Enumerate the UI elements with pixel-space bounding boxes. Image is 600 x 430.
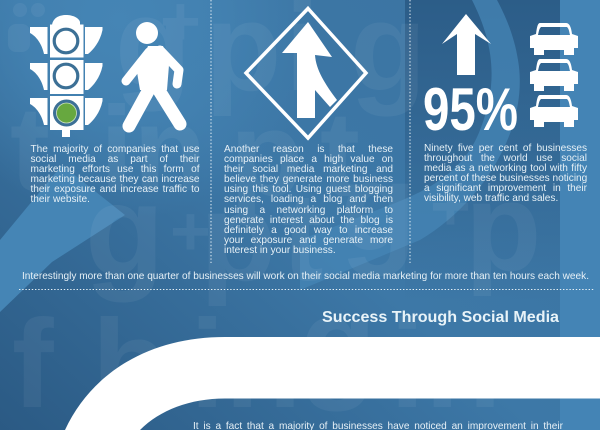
text: 95 percent column: percent of these businesses noticing <box>424 173 587 184</box>
text: marketing values column <box>224 144 393 256</box>
text: traffic column: their exposure and increase traffic to <box>30 184 200 195</box>
text: traffic column: social media as part of their <box>30 154 200 165</box>
background graphic: n <box>425 295 501 430</box>
background graphic: g <box>340 138 416 277</box>
text: marketing values column: their social media marketing and <box>224 164 393 175</box>
text: traffic column: their website. <box>30 194 90 205</box>
background graphic: i <box>390 295 425 430</box>
heading: success through social media: Success Through Social Media <box>322 308 559 326</box>
text: 95 percent column: visibility, web traffic and sales. <box>424 193 558 204</box>
background graphic: p <box>465 158 541 297</box>
text: marketing values column: Another reason is that these <box>224 144 393 154</box>
text: 95 percent column: media as a networking tool with fifty <box>424 163 587 174</box>
background graphic: g <box>300 273 376 412</box>
background graphic: t <box>282 168 324 307</box>
text: 95 percent column: throughout the world use social <box>424 153 587 164</box>
text: 95 percent column <box>424 142 587 204</box>
background graphic: p <box>230 87 303 221</box>
text: marketing values column: services, loading a blog and then <box>224 194 393 205</box>
statistic: 95%: 95% <box>423 76 518 143</box>
text: marketing values column: generate interest about the blog is <box>224 215 393 226</box>
background graphic: t <box>10 82 50 216</box>
text: marketing values column: companies place a high value on <box>224 154 393 165</box>
background graphic: i <box>190 295 225 430</box>
background graphic: in <box>100 82 207 216</box>
text: marketing values column: believe they generate more business <box>224 174 393 185</box>
text: traffic column: marketing efforts use this form of <box>30 164 200 175</box>
text: traffic column: The majority of companies that use <box>30 144 200 154</box>
text: marketing values column: your exposure and generate more <box>224 235 393 246</box>
text: 95 percent column: a significant improvement in their <box>424 183 587 194</box>
background graphic: f <box>12 295 54 430</box>
text: marketing values column: definitely a good way to increase <box>224 225 393 236</box>
background graphic: t <box>320 87 360 221</box>
background graphic: g <box>85 157 164 303</box>
text: traffic column <box>30 144 200 205</box>
text: marketing values column: using this tool. Using guest blogging <box>224 184 393 195</box>
text: full width note: Interestingly more than one quarter of businesses will work on their social media marketing for more than ten hours each week. <box>22 271 589 282</box>
text: marketing values column: interest in your business. <box>224 245 336 256</box>
text: traffic column: marketing because they can increase <box>30 174 200 185</box>
background graphic: p <box>200 168 276 307</box>
background graphic: + <box>430 167 471 245</box>
background graphic: + <box>170 192 211 270</box>
background graphic: b <box>92 295 168 430</box>
background graphic: n <box>225 295 301 430</box>
text: marketing values column: using a networking platform to <box>224 205 393 216</box>
text: 95 percent column: Ninety five per cent of businesses <box>424 142 587 154</box>
